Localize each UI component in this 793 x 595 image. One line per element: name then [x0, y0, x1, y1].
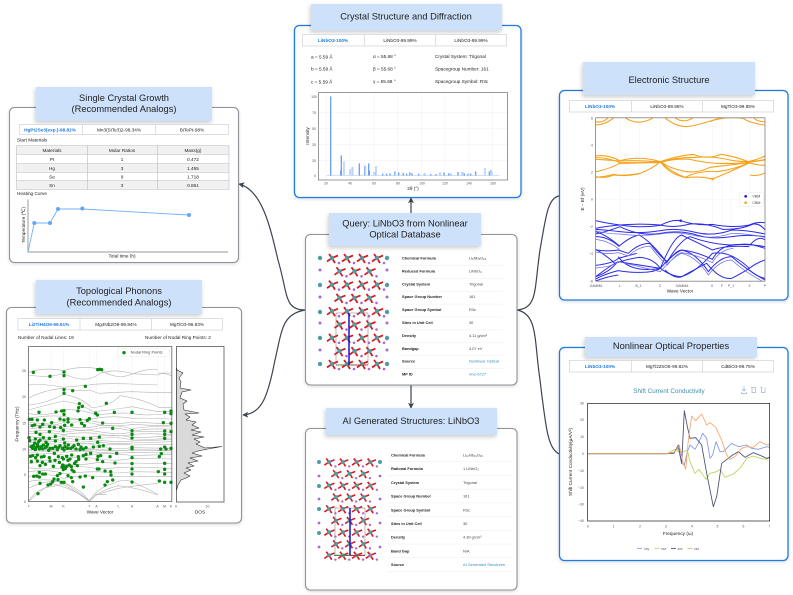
- nonlinear axis labels: −10: [578, 469, 584, 473]
- tabs: electronic analogs: LiNbO3-100%: [585, 104, 616, 109]
- diffraction axis labels: 75: [312, 111, 316, 115]
- legend: tensor components: zzz: [694, 547, 699, 551]
- table: material properties: Space Group Number: [402, 294, 442, 299]
- tabs: nonlinear analogs: MgTi2ZnO6-99.82%: [646, 364, 688, 369]
- nonlinear axis labels: 4: [691, 524, 693, 528]
- lattice parameters: b = 5.59 Å: [311, 66, 333, 72]
- nonlinear axis labels: 0: [587, 524, 589, 528]
- phonon axis labels: L: [118, 504, 120, 508]
- panel: crystal structure and diffraction: [294, 4, 521, 198]
- heading: crystal structure: Crystal Structure and Diffraction: [340, 12, 472, 22]
- lattice parameters: a = 5.59 Å: [311, 54, 333, 60]
- diffraction axis labels: 0: [314, 174, 316, 178]
- tabs: analog selector: HgPt2Se3(exp.)-98.82%: [24, 127, 77, 132]
- electronic axis labels: GAMMA: [590, 284, 603, 288]
- tabs: analog selector: Mn3(SiTe3)2-98.34%: [97, 127, 141, 132]
- table: material properties: MP ID: [402, 372, 413, 377]
- table: start materials: Materials: [42, 148, 62, 153]
- electronic axis labels: 4: [591, 144, 593, 148]
- table: generated properties: Band Gap: [391, 548, 410, 553]
- heading: crystal structure: [311, 4, 502, 30]
- electronic axis labels: −4: [589, 252, 593, 256]
- table: material properties: 30: [469, 320, 474, 325]
- table: generated properties: Density: [391, 535, 406, 540]
- table: start materials: Molar Ratios: [109, 148, 136, 153]
- table: material properties: Reduced Formula: [402, 268, 436, 273]
- phonon axis labels: A: [95, 504, 98, 508]
- table: start materials: Sn: [49, 183, 55, 188]
- diffraction axis labels: 100: [311, 95, 317, 99]
- nonlinear axis labels: 7: [769, 524, 771, 528]
- legend: tensor components: xxy: [644, 547, 649, 551]
- phonon axis labels: Wave Vector: [87, 510, 114, 514]
- heading: single crystal growth: (Recommended Analogs): [72, 104, 176, 114]
- electronic axis labels: Wave Vector: [667, 288, 694, 294]
- text: nodal line count: Number of Nodal Lines: 19: [18, 335, 74, 340]
- nonlinear axis labels: 2: [639, 524, 641, 528]
- table: material properties: Chemical Formula: [402, 256, 437, 260]
- legend: tensor components: xxz: [661, 547, 666, 551]
- lattice parameters: Spacegroup Number: 161: [435, 66, 489, 71]
- tabs: phonon analogs: [18, 318, 222, 330]
- table: generated properties: N/A: [463, 548, 470, 553]
- nonlinear axis labels: 10: [580, 435, 584, 439]
- table: material properties: Trigonal: [469, 281, 483, 286]
- chart: diffraction pattern: [318, 93, 507, 180]
- diffraction axis labels: 40: [348, 182, 352, 186]
- table: material properties: Source: [402, 359, 416, 364]
- nonlinear axis labels: 6: [743, 524, 745, 528]
- tabs: crystal analogs: [302, 34, 506, 46]
- tabs: crystal analogs: LiNbO3-99.99%: [383, 38, 417, 43]
- diffraction axis labels: 120: [442, 182, 448, 186]
- phonon axis labels: 0: [24, 500, 26, 504]
- heading: query: [329, 213, 481, 246]
- nonlinear axis labels: 20: [580, 418, 584, 422]
- table: generated properties: Li₁₀Nb₁₀O₃₀: [463, 452, 483, 458]
- table: generated properties: 1 LiNbO₃: [463, 466, 479, 471]
- legend: VBM CBM: CBM: [752, 201, 760, 205]
- heading: query: Optical Database: [369, 230, 441, 240]
- table: start materials: 1.718: [187, 174, 199, 179]
- table: start materials: 0.861: [187, 183, 199, 188]
- legend: nodal ring points: [117, 348, 169, 356]
- diffraction axis labels: 140: [466, 182, 472, 186]
- diffraction axis labels: 160: [490, 182, 496, 186]
- tabs: nonlinear analogs: LiNbO3-100%: [585, 364, 616, 369]
- connector: query to nonlinear optical: [517, 310, 559, 454]
- tabs: nonlinear analogs: CdBiO3-99.75%: [721, 364, 755, 369]
- electronic axis labels: P_1: [728, 284, 734, 288]
- diffraction axis labels: 100: [419, 182, 425, 186]
- table: generated properties: 4.39 g/cm³: [463, 535, 482, 540]
- table: generated properties: Space Group Number: [391, 494, 431, 499]
- arrow: query to AI generated structures: [410, 385, 412, 408]
- electronic axis labels: 2: [591, 170, 593, 174]
- lattice parameters: α = 55.68 °: [373, 54, 396, 59]
- arrow: query to crystal structure: [410, 198, 412, 234]
- tabs: electronic analogs: MgTiO3-99.85%: [721, 104, 755, 109]
- nonlinear axis labels: −30: [578, 502, 584, 506]
- diffraction axis labels: [305, 95, 496, 191]
- tabs: analog selector: [20, 124, 228, 134]
- electronic axis labels: P: [764, 284, 767, 288]
- image: generated crystal structure: [317, 458, 382, 561]
- panel: single crystal growth: [10, 87, 238, 262]
- table: material properties: mvc-6727: [469, 372, 486, 377]
- electronic axis labels: E − Ef (eV): [580, 187, 585, 211]
- table: material properties: 3.07 eV: [469, 346, 483, 351]
- electronic axis labels: 6: [591, 116, 593, 120]
- table: generated properties: Rational Formula: [391, 466, 424, 471]
- table: generated properties: Source: [391, 562, 405, 567]
- chart: phonon band structure: [28, 346, 172, 502]
- electronic axis labels: B_1: [635, 284, 642, 288]
- legend: VBM CBM: VBM: [752, 194, 760, 198]
- text: nodal ring points count: Number of Nodal Ring Points: 2: [145, 335, 211, 340]
- table: material properties: 161: [469, 294, 476, 299]
- heading: single crystal growth: [36, 87, 212, 121]
- table: material properties: Li₆Nb₆O₁₈: [469, 256, 486, 260]
- table: start materials: Mass(g): [185, 148, 202, 153]
- phonon axis labels: 25: [22, 369, 26, 373]
- table: generated properties: 161: [463, 494, 470, 499]
- tabs: phonon analogs: MgTiO3-99.83%: [170, 322, 204, 327]
- table: generated properties: Sites in Unit Cell: [391, 521, 422, 526]
- arrow: query to single crystal growth: [239, 184, 305, 310]
- table: start materials: Pt: [50, 157, 55, 162]
- chart: heating curve: [21, 200, 228, 258]
- table: generated properties: Chemical Formula: [391, 452, 426, 458]
- electronic axis labels: F: [721, 284, 723, 288]
- tabs: electronic analogs: [570, 100, 774, 112]
- chart title: Shift Current Conductivity: [633, 388, 706, 395]
- heading: single crystal growth: Single Crystal Growth: [79, 93, 169, 103]
- table: start materials: Se: [49, 174, 55, 179]
- legend: nodal ring points: Nodal Ring Points: [131, 350, 163, 355]
- lattice parameters: [311, 54, 489, 84]
- electronic axis labels: 0: [591, 198, 593, 202]
- table: start materials: 1.455: [187, 166, 199, 171]
- table: start materials: 0.472: [187, 157, 199, 162]
- phonon axis labels: DOS: [195, 510, 205, 514]
- table: start materials: 3: [121, 166, 124, 171]
- nonlinear axis labels: 1: [613, 524, 615, 528]
- phonon axis labels: K: [62, 504, 65, 508]
- heading: query: Query: LiNbO3 from Nonlinear: [342, 218, 468, 228]
- electronic axis labels: −2: [589, 225, 593, 229]
- tabs: crystal analogs: LiNbO3-100%: [318, 38, 349, 43]
- diffraction axis labels: 80: [396, 182, 400, 186]
- legend: tensor components: zxx: [678, 547, 683, 551]
- table: generated properties: Crystal System: [391, 480, 420, 485]
- phonon axis labels: Frequency (THz): [14, 406, 20, 442]
- nonlinear axis labels: Shift Current Conductivity(μA/V²): [568, 428, 573, 496]
- lattice parameters: β = 55.68 °: [373, 66, 396, 71]
- table: material properties: Bandgap: [402, 346, 419, 351]
- heading: AI generated: [326, 408, 497, 435]
- table: material properties: Density: [402, 333, 417, 338]
- nonlinear axis labels: 0: [582, 452, 584, 456]
- nonlinear axis labels: [568, 402, 771, 536]
- chart: density of states: [176, 346, 224, 502]
- table: generated properties: R3c: [463, 507, 470, 512]
- panel: topological phonons: [6, 280, 242, 523]
- connector: query to electronic structure: [517, 196, 559, 310]
- arrow: query to topological phonons: [243, 310, 305, 415]
- table: generated properties: 30: [463, 521, 468, 526]
- tabs: analog selector: BiTePt-98%: [180, 127, 204, 132]
- heading: topological phonons: Topological Phonons: [76, 286, 162, 296]
- phonon axis labels: 5: [24, 473, 26, 477]
- table: material properties: [398, 256, 503, 377]
- heading: AI generated: AI Generated Structures: LiNbO3: [343, 416, 479, 426]
- table: start materials: [16, 146, 229, 190]
- chart: heating curve: Total time (h): [108, 254, 136, 258]
- phonon axis labels: H: [131, 504, 134, 508]
- tabs: electronic analogs: LiNbO3-99.96%: [650, 104, 684, 109]
- phonon axis labels: [14, 369, 209, 514]
- diffraction axis labels: 60: [372, 182, 376, 186]
- electronic axis labels: L: [619, 284, 621, 288]
- heading: nonlinear optical: Nonlinear Optical Properties: [613, 341, 729, 351]
- legend: tensor components: [637, 547, 699, 551]
- table: generated properties: Space Group Symbol: [391, 507, 430, 512]
- table: material properties: Nonlinear Optical: [469, 359, 499, 364]
- chart: heating curve: Temperature (℃): [21, 207, 26, 243]
- table: start materials: Hg: [49, 166, 55, 171]
- electronic axis labels: Z: [659, 284, 661, 288]
- diffraction axis labels: 25: [312, 143, 316, 147]
- image: LiNbO3 crystal structure: [318, 254, 389, 370]
- phonon axis labels: 0: [175, 504, 177, 508]
- heading: topological phonons: [36, 280, 202, 314]
- phonon axis labels: 15: [22, 422, 26, 426]
- nonlinear axis labels: 3: [665, 524, 667, 528]
- heading: electronic structure: [583, 62, 755, 95]
- panel: AI generated structures: [306, 408, 517, 590]
- electronic axis labels: [580, 116, 767, 294]
- green nodal ring points: [29, 369, 171, 494]
- table: material properties: LiNbO₃: [469, 268, 482, 273]
- electronic axis labels: Z: [748, 284, 751, 288]
- phonon axis labels: K: [170, 504, 173, 508]
- nonlinear axis labels: −40: [578, 519, 584, 523]
- diffraction axis labels: 25: [312, 159, 316, 163]
- electronic axis labels: GAMMA: [676, 284, 689, 288]
- electronic axis labels: X: [711, 284, 714, 288]
- table: start materials: 3: [121, 183, 124, 188]
- table: material properties: Space Group Symbol: [402, 307, 441, 312]
- nonlinear axis labels: Frequency (ω): [663, 531, 694, 536]
- lattice parameters: Crystal System: Trigonal: [435, 54, 486, 59]
- tabs: crystal analogs: LiNbO3-99.99%: [454, 38, 488, 43]
- panel: query LiNbO3: [306, 213, 517, 385]
- phonon axis labels: Γ: [28, 504, 30, 508]
- nonlinear axis labels: −20: [578, 486, 584, 490]
- phonon axis labels: A: [156, 504, 159, 508]
- tabs: phonon analogs: Mg4Nb2O9-99.84%: [95, 322, 137, 327]
- diffraction axis labels: 50: [312, 127, 316, 131]
- nonlinear axis labels: 5: [717, 524, 719, 528]
- nonlinear axis labels: 30: [580, 402, 584, 406]
- heading: nonlinear optical: [585, 337, 757, 357]
- tabs: phonon analogs: Li2TiH4O9-99.91%: [29, 322, 70, 327]
- electronic axis labels: −6: [589, 280, 593, 284]
- phonon axis labels: 10: [22, 448, 26, 452]
- heading: topological phonons: (Recommended Analogs): [67, 298, 171, 308]
- lattice parameters: γ = 55.68 °: [373, 79, 396, 84]
- phonon axis labels: M: [50, 504, 53, 508]
- table: generated properties: [388, 452, 512, 571]
- table: material properties: 4.11 g/cm³: [469, 333, 488, 338]
- phonon axis labels: 20: [22, 395, 26, 399]
- phonon axis labels: Γ: [89, 504, 91, 508]
- toolbar icons: [742, 386, 765, 394]
- panel: electronic structure: [560, 62, 788, 300]
- table: material properties: Sites in Unit Cell: [402, 320, 433, 325]
- table: start materials: 9: [121, 174, 124, 179]
- legend: VBM CBM: [739, 192, 763, 206]
- heading: electronic structure: Electronic Structure: [628, 75, 710, 85]
- table: start materials: 1: [121, 157, 124, 162]
- lattice parameters: Spacegroup Symbol: R3c: [435, 79, 489, 84]
- tabs: nonlinear analogs: [570, 360, 774, 372]
- diffraction axis labels: 20: [324, 182, 328, 186]
- table: material properties: R3c: [469, 307, 476, 312]
- lattice parameters: c = 5.59 Å: [311, 78, 333, 84]
- label: heating curve: Heating Curve: [17, 191, 47, 196]
- panel: nonlinear optical properties: [560, 337, 788, 560]
- diffraction axis labels: Intensity: [305, 127, 310, 145]
- connector arrows: [239, 184, 559, 454]
- label: start materials: Start Materials: [17, 138, 48, 142]
- table: generated properties: Trigonal: [463, 480, 477, 485]
- table: generated properties: AI Generated Structures: [463, 562, 505, 567]
- diffraction axis labels: 2θ (°): [407, 186, 419, 191]
- chart: shift current conductivity: [588, 403, 770, 521]
- table: material properties: Crystal System: [402, 281, 431, 286]
- phonon axis labels: M: [163, 504, 166, 508]
- phonon axis labels: 10: [206, 504, 209, 508]
- chart: band structure: [596, 118, 765, 283]
